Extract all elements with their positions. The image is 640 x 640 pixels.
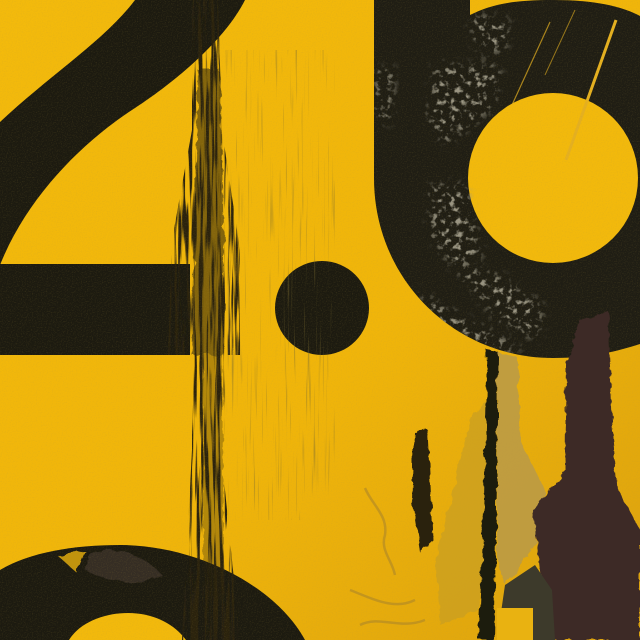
- numeral 2: black stroke and base bar: [0, 0, 245, 355]
- sandy corroded patch: [436, 352, 545, 625]
- lower corner grey scrap: [497, 565, 555, 640]
- dark vertical streak crossing numeral 2: [168, 0, 240, 640]
- fine vertical scratches on yellow: [225, 50, 335, 520]
- brown peeled paint: [533, 311, 640, 640]
- crackled stains at lower middle: [350, 488, 425, 625]
- centre black dot: [275, 261, 369, 355]
- lower numeral: black arc with yellow counter: [0, 545, 305, 640]
- scratches on numeral 6: [512, 10, 616, 160]
- numeral 6: black ring with yellow counter: [374, 0, 640, 358]
- worn grey patches on numeral 6: [376, 15, 542, 352]
- small gouge: [412, 430, 433, 552]
- vertical tear: [478, 350, 498, 640]
